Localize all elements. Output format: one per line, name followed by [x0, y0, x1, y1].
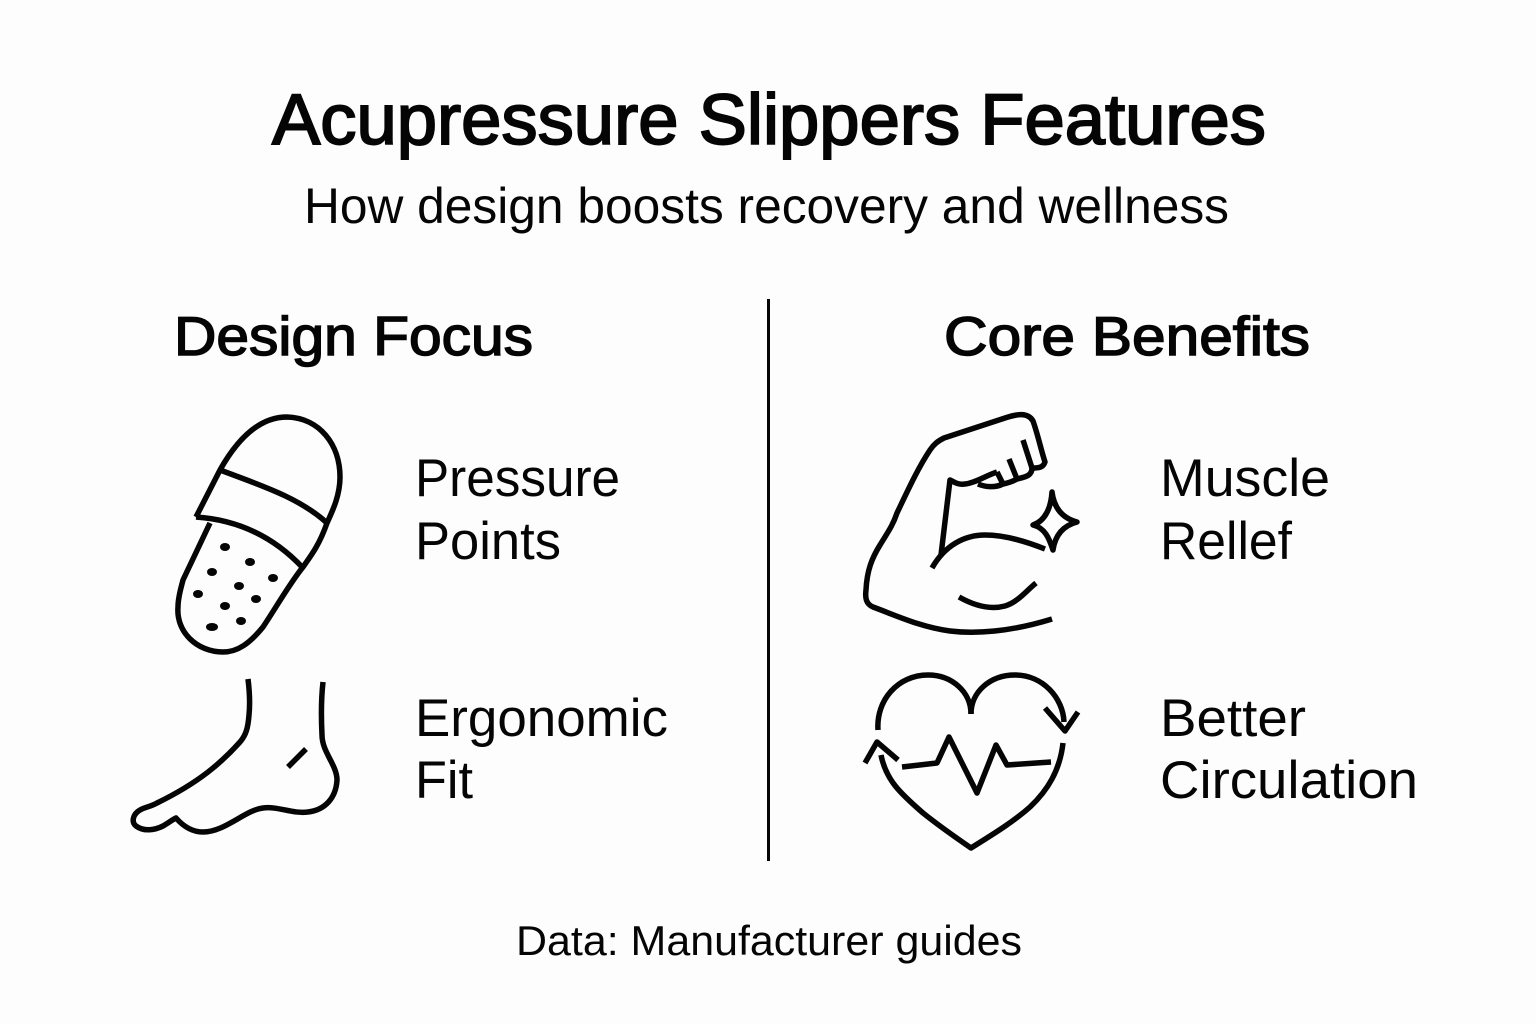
footer: data source: Data: Manufacturer guides	[516, 917, 1022, 964]
label: pressure points: Points	[415, 512, 561, 571]
icon: flexed arm with sparkle	[866, 415, 1077, 632]
label: pressure points: Pressure	[415, 449, 620, 508]
label: better circulation: Circulation	[1160, 751, 1418, 810]
subtitle: How design boosts recovery and wellness	[304, 178, 1229, 234]
label: better circulation	[1160, 689, 1418, 810]
heading: core benefits: Core Benefits	[944, 305, 1310, 367]
icon: foot	[133, 679, 337, 832]
panel: core benefits	[865, 305, 1418, 848]
label: pressure points	[415, 449, 620, 571]
panel: design focus	[133, 305, 668, 832]
icon: heart with pulse and circulation arrows	[865, 675, 1078, 848]
label: ergonomic fit: Ergonomic	[415, 689, 668, 748]
label: better circulation: Better	[1160, 689, 1306, 748]
label: ergonomic fit: Fit	[415, 751, 473, 810]
label: muscle relief: Rellef	[1160, 512, 1292, 571]
title: Acupressure Slippers Features	[272, 81, 1266, 160]
heading: design focus: Design Focus	[174, 305, 533, 367]
label: muscle relief: Muscle	[1160, 449, 1330, 508]
divider	[767, 299, 770, 861]
icon: slipper with pressure points	[178, 417, 340, 652]
label: ergonomic fit	[415, 689, 668, 810]
label: muscle relief	[1160, 449, 1330, 571]
